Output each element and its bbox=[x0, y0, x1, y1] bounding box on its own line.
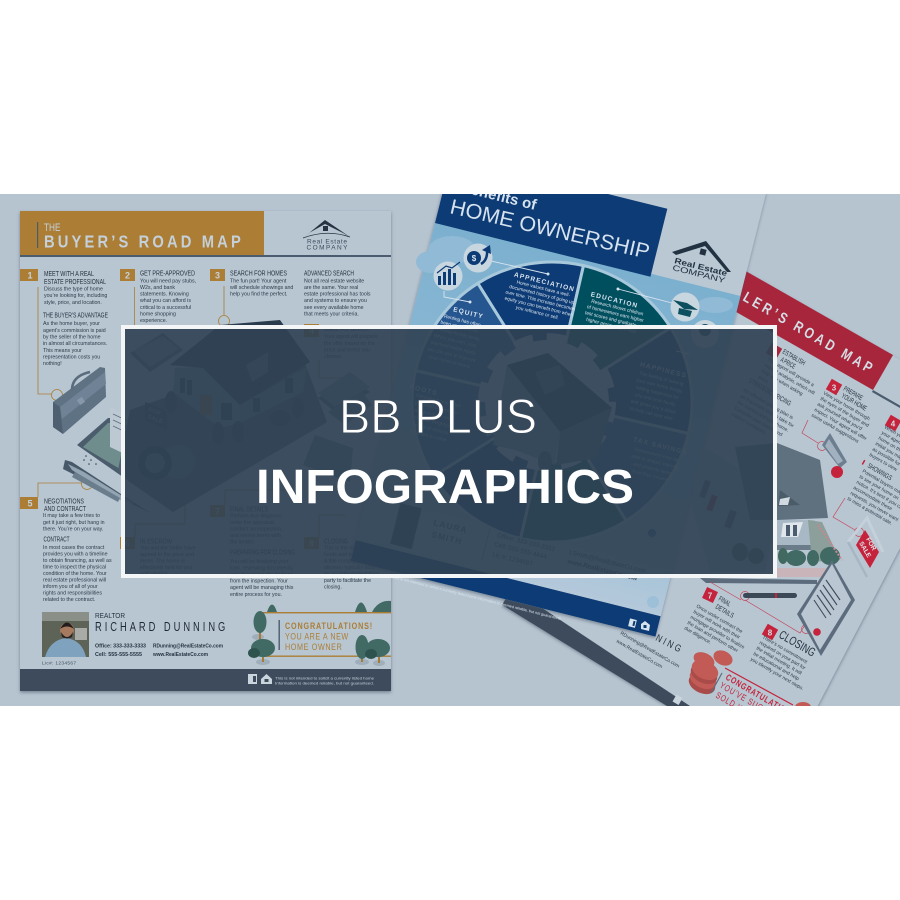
sector: appreciation bbox=[478, 262, 584, 402]
step 2: get pre-approved: critical to a successful bbox=[140, 305, 191, 311]
label: roots: and local schools bbox=[412, 422, 449, 437]
icon: chat bubble and check badge bbox=[138, 445, 195, 480]
step 8: closing bbox=[749, 624, 818, 692]
step 3: search for homes: The fun part! Your agent bbox=[230, 278, 287, 284]
label: education: higher percentages than bbox=[585, 317, 637, 335]
label: tax savings: able to deduct interest bbox=[631, 453, 679, 471]
step 2: get pre-approved: You will need pay stubs, bbox=[140, 278, 196, 284]
paper and sky area bbox=[351, 116, 766, 637]
step 2: establish a price: STRATEGIC PRICING bbox=[747, 378, 792, 408]
step 3: search for homes bbox=[210, 268, 293, 298]
agent contact: laura smith: Cell: 555-555-4444 bbox=[494, 541, 548, 561]
clouds bbox=[416, 236, 733, 313]
step 7: final details: from the inspection. Your bbox=[230, 578, 288, 584]
step 1: meet with a real estate professional: 1 bbox=[27, 270, 33, 280]
agent details: Office: 333-333-3333 bbox=[95, 644, 146, 650]
step 3: search for homes: 3 bbox=[215, 270, 220, 280]
agent details: seller's document: NING bbox=[654, 632, 685, 655]
label: equity: your home or invest bbox=[428, 354, 471, 370]
step 8: closing: CLOSING bbox=[324, 536, 348, 546]
heading: benefits of home ownership: Benefits of bbox=[459, 179, 539, 214]
icon: money stacks bbox=[318, 390, 369, 410]
icon: for sale sign: FOR bbox=[864, 536, 877, 552]
sector: tax savings bbox=[552, 402, 688, 521]
step 8: closing: required on your part for bbox=[758, 640, 807, 672]
sector: happiness bbox=[552, 328, 692, 434]
agent details: Cell: 555-555-5555 bbox=[95, 652, 142, 658]
agent contact: laura smith: www.RealEstateCo.com bbox=[566, 558, 638, 582]
step 8: closing: as an independent third bbox=[324, 572, 379, 578]
label: tax savings bbox=[631, 436, 688, 484]
step 3: search for homes: will schedule showings and bbox=[230, 285, 293, 291]
step 2: establish a price: the market and your home. bbox=[736, 400, 790, 434]
step 3: prepare your home: the eyes of the buyer and bbox=[819, 396, 870, 429]
step 7: final details: loan, reviewing documents, bbox=[230, 566, 294, 572]
illustration: house bbox=[690, 443, 842, 584]
step 6: in escrow: terms. The home is bbox=[140, 558, 185, 564]
callout: you've successfully sold your home: SOLD YOUR HOME bbox=[714, 690, 781, 735]
step 7: final details: and review terms with bbox=[230, 533, 281, 539]
agent contact: laura smith bbox=[390, 503, 659, 608]
logo: real estate company bbox=[303, 220, 350, 252]
label: education bbox=[584, 291, 645, 335]
sector: roots bbox=[412, 370, 552, 476]
footer: home ownership document bbox=[392, 575, 650, 631]
step 3: prepare your home: YOUR HOME bbox=[840, 393, 868, 413]
title: INFOGRAPHICS: INFOGRAPHICS bbox=[256, 461, 634, 514]
step 1: meet with a real estate professional: representation costs you bbox=[43, 354, 100, 360]
step 7: final details: conduct an inspection, bbox=[230, 526, 282, 532]
step 2: establish a price: help you when asking bbox=[760, 369, 804, 397]
step 7: final details: the loan and perform other bbox=[686, 620, 739, 654]
step 3: prepare your home: expect. Your agent will offer bbox=[813, 407, 868, 442]
text block: advanced search: and systems to ensure you bbox=[304, 298, 367, 304]
label: happiness: HAPPINESS bbox=[639, 361, 688, 380]
callout: you've successfully sold your home: YOU’VE SUCCESSFULLY bbox=[718, 680, 805, 736]
step 5: negotiations and contract: time to inspect the physical bbox=[43, 564, 106, 570]
text block: advanced search: estate professional has tools bbox=[304, 292, 371, 298]
step 4: make an offer bbox=[304, 324, 378, 360]
icon: for sale sign: SALE bbox=[857, 540, 872, 560]
header: seller's road map: LER’S ROAD MAP bbox=[740, 289, 875, 376]
title: BB PLUS: BB PLUS bbox=[339, 391, 537, 444]
panel: buyer's road map document bbox=[20, 211, 391, 691]
step 3: prepare your home: 3 bbox=[832, 384, 837, 392]
step 7: final details: FINAL bbox=[717, 596, 732, 608]
label: roots: for years to come bbox=[410, 429, 447, 444]
label: tax savings: and property taxes bbox=[632, 461, 673, 477]
agent details: seller's document: RDunning@RealEstateCo.com bbox=[619, 631, 680, 669]
step 2: get pre-approved: experience. bbox=[140, 318, 167, 324]
label: education: EDUCATION bbox=[590, 291, 639, 310]
step 4: make an offer: MAKE AN OFFER bbox=[324, 324, 369, 333]
heading: benefits of home ownership: HOME OWNERSHIP bbox=[448, 195, 652, 264]
step 2: establish a price: an important step to take for bbox=[739, 394, 795, 429]
step 8: closing: closing. bbox=[324, 584, 342, 590]
step 7: final details: 7 bbox=[708, 592, 713, 600]
illustration: isometric house bbox=[118, 320, 326, 470]
footer: seller's document bbox=[502, 588, 690, 706]
step 3: prepare your home: PREPARE bbox=[842, 386, 864, 402]
step 5: negotiations and contract: related to the contract. bbox=[43, 597, 95, 603]
icon: money growth bbox=[464, 244, 550, 276]
step 1: meet with a real estate professional: THE BUYER’S ADVANTAGE bbox=[43, 310, 108, 320]
header: seller's road map bbox=[736, 272, 900, 408]
label: equity: throwing money away. bbox=[434, 325, 481, 343]
step 2: establish a price: Consider your needs and bbox=[733, 406, 784, 438]
label: happiness: you and your family bbox=[634, 392, 677, 408]
step 3: search for homes: SEARCH FOR HOMES bbox=[230, 268, 287, 278]
sector: stability bbox=[433, 402, 552, 538]
label: education: Research shows children bbox=[591, 299, 644, 318]
icon: clipboard bbox=[797, 560, 855, 656]
step 1: meet with a real estate professional: ESTATE PROFESSIONAL bbox=[44, 277, 106, 286]
step 5: negotiations and contract: rights and responsibilities bbox=[43, 590, 102, 596]
step 4: showings: to miss a potential sale. bbox=[846, 496, 893, 527]
step 8: closing bbox=[304, 536, 379, 590]
step 5: negotiations and contract: get it just right, but hang in bbox=[43, 520, 105, 526]
label: appreciation: APPRECIATION bbox=[513, 272, 576, 294]
icon: for sale sign bbox=[848, 518, 883, 577]
step 2: get pre-approved: statements. Knowing bbox=[140, 292, 189, 298]
illustration: isometric house: FOR bbox=[147, 407, 162, 417]
panel: home ownership document bbox=[351, 116, 766, 637]
agent contact: laura smith: Office: 333-333-3333 bbox=[497, 532, 556, 553]
step 3: prepare your home bbox=[810, 379, 871, 445]
icons: trees bbox=[248, 601, 391, 666]
icon: pen bbox=[743, 593, 797, 598]
icon: coins bbox=[686, 647, 811, 712]
text block: advanced search: see every available home bbox=[304, 305, 364, 311]
step 1: meet with a real estate professional: in almost all circumstances. bbox=[43, 341, 107, 347]
icon: contract paper bbox=[303, 435, 353, 482]
logo: real estate company: COMPANY bbox=[306, 244, 348, 252]
step 2: get pre-approved: what you can afford is bbox=[140, 298, 191, 304]
step 1: meet with a real estate professional bbox=[20, 269, 108, 367]
background band bbox=[0, 194, 900, 706]
footer: buyer's document: This is not intended to solicit a currently listed home bbox=[275, 676, 375, 680]
label: tax savings: from their income bbox=[632, 469, 669, 484]
label: roots: with your neighbors bbox=[411, 414, 454, 430]
step 8: closing: 8 bbox=[768, 628, 773, 638]
step 7: final details: 7 bbox=[215, 506, 220, 516]
step 2: establish a price: market conditions. bbox=[730, 412, 767, 437]
label: appreciation: equity you can benefit from when bbox=[504, 296, 574, 319]
connector lines: seller's map bbox=[710, 420, 864, 634]
step 4: make an offer: price and terms you bbox=[324, 348, 370, 354]
step 4: showings: buyers to view bbox=[868, 452, 898, 473]
label: appreciation bbox=[504, 272, 576, 321]
step 8: closing: the initial meeting. It will bbox=[755, 646, 803, 677]
step 7: final details: PREPARING FOR CLOSING bbox=[230, 548, 295, 556]
icon: keyboard tablet bbox=[822, 433, 847, 478]
step 8: closing: attorney typically acts bbox=[324, 565, 375, 571]
label: happiness: and gives you a place bbox=[630, 399, 677, 416]
icon: growth chart bbox=[434, 262, 472, 304]
logo: real estate company: Real Estate bbox=[307, 238, 347, 246]
callout: congratulations: HOME OWNER bbox=[285, 642, 342, 652]
label: roots: and put down roots bbox=[414, 407, 455, 423]
label: equity: When you own, your bbox=[433, 333, 478, 349]
icon: location pin bbox=[676, 320, 719, 354]
step 2: get pre-approved: GET PRE-APPROVED bbox=[140, 268, 195, 278]
callout: congratulations bbox=[263, 612, 391, 657]
step 8: closing: There’s no commitment bbox=[761, 635, 809, 666]
step 8: closing: 8 bbox=[309, 538, 314, 548]
step 1: meet with a real estate professional: you’re looking for, including bbox=[44, 293, 107, 299]
footer: buyer's document bbox=[20, 669, 391, 691]
icon: pen bbox=[63, 460, 150, 513]
label: equity: you can use to improve bbox=[426, 346, 476, 364]
step 4: showings: accommodate these bbox=[852, 485, 893, 512]
step 2: establish a price: A PRICE bbox=[779, 357, 797, 371]
label: appreciation: over time. This increase becomes bbox=[505, 289, 576, 313]
sector: equity bbox=[416, 283, 552, 402]
step 7: final details: Perform due diligence, bbox=[230, 514, 283, 520]
step 6: in escrow: agreed to the price and bbox=[140, 552, 194, 558]
logo: real estate company: Real Estate bbox=[674, 256, 729, 278]
step 8: closing: party to facilitate the bbox=[324, 578, 371, 584]
step 4: showings: requests, you never want bbox=[849, 491, 900, 523]
label: happiness: The feeling of owning bbox=[638, 371, 684, 388]
agent contact: laura smith: LAURA bbox=[433, 517, 469, 535]
label: equity: payment builds equity bbox=[430, 340, 477, 357]
panel: seller's road map document bbox=[501, 272, 900, 706]
agent details: REALTOR bbox=[95, 613, 125, 620]
step 5: negotiations and contract: AND CONTRACT bbox=[44, 504, 86, 513]
step 6: in escrow: 6 bbox=[125, 538, 130, 548]
step 4: make an offer: Your agent will prepare bbox=[324, 334, 378, 340]
step 7: final details: You will be finalizing your bbox=[230, 559, 289, 565]
footer: home ownership document: This is not intended to solicit a currently listed home information is deemed reliable, but not guaranteed! bbox=[392, 575, 561, 621]
icon: smartphone bbox=[77, 414, 162, 504]
wheel chart: benefits bbox=[412, 262, 692, 542]
text block: advanced search: Not all real estate website bbox=[304, 278, 364, 284]
step 7: final details bbox=[210, 504, 295, 598]
text block: advanced search: that meets your criteria. bbox=[304, 312, 359, 318]
step 4: make an offer: choose. bbox=[324, 354, 342, 360]
agent contact: laura smith: Lic #: 1234567 bbox=[492, 551, 534, 568]
step 7: final details: order the appraisal, bbox=[230, 520, 275, 526]
step 7: final details: FINAL DETAILS bbox=[230, 504, 268, 514]
icon: graduation cap bbox=[616, 288, 700, 322]
document previews bbox=[18, 194, 900, 706]
sector: wealth bbox=[520, 402, 626, 542]
agent details: RDunning@RealEstateCo.com bbox=[153, 644, 224, 650]
step 5: negotiations and contract: real estate professional will bbox=[43, 578, 106, 584]
label: equity: Renting has often bbox=[443, 314, 482, 329]
agent details: seller's document: www.RealEstateCo.com bbox=[615, 639, 663, 670]
label: appreciation: documented history of going up bbox=[509, 284, 575, 306]
step 8: closing: A title company or bbox=[324, 558, 366, 564]
step 8: closing: you identify your next steps. bbox=[749, 657, 805, 692]
title overlay panel bbox=[123, 327, 775, 576]
step 5: negotiations and contract: NEGOTIATIONS bbox=[44, 496, 84, 506]
text block: advanced search: ADVANCED SEARCH bbox=[304, 268, 354, 278]
icon: briefcase bbox=[53, 367, 106, 434]
label: equity: EQUITY bbox=[452, 306, 484, 321]
agent details: RICHARD DUNNING bbox=[95, 621, 225, 634]
step 7: final details: mortgage provider to finalize bbox=[689, 615, 746, 651]
step 2: establish a price: An effective pricing plan is bbox=[742, 388, 795, 421]
step 7: final details: DETAILS bbox=[714, 604, 735, 620]
step 7: final details: due diligence. bbox=[683, 626, 712, 646]
step 2: get pre-approved: W2s, and bank bbox=[140, 285, 175, 291]
connector lines bbox=[38, 286, 345, 537]
step 2: establish a price: Your agent will provide a bbox=[766, 357, 815, 388]
step 3: prepare your home: some useful suggestions bbox=[810, 413, 860, 445]
step 5: negotiations and contract: condition of the home. Your bbox=[43, 571, 107, 577]
step 6: in escrow: You and the Seller have bbox=[140, 546, 196, 552]
label: appreciation: Home values have a well- bbox=[516, 279, 571, 299]
label: roots: you build community bbox=[414, 400, 459, 416]
step 1: meet with a real estate professional: This means your bbox=[43, 348, 82, 354]
label: appreciation: you refinance or sell. bbox=[515, 305, 559, 321]
callout: congratulations: YOU ARE A NEW bbox=[285, 632, 348, 642]
step 6: in escrow: effectively held for you bbox=[140, 565, 192, 571]
logo: real estate company bbox=[672, 241, 731, 285]
step 7: final details: buyer will work with their bbox=[692, 609, 741, 641]
header: buyer's road map: THE bbox=[44, 222, 61, 234]
step 7: final details: agent will be managing this bbox=[230, 585, 294, 591]
label: equity: been compared to bbox=[440, 319, 479, 335]
step 7: final details: entire process for you. bbox=[230, 592, 282, 598]
agent details: Lic#: 1234567 bbox=[42, 660, 76, 666]
step 4: showings: to see your home on bbox=[858, 474, 900, 502]
step 5: negotiations and contract: provides you with a timeline bbox=[43, 552, 108, 558]
step 2: establish a price: price. bbox=[757, 375, 770, 386]
icon: money growth: $ bbox=[472, 254, 477, 263]
agent photo bbox=[42, 612, 89, 657]
step 8: closing: This is the to transfer bbox=[324, 546, 373, 552]
step 6: in escrow: IN ESCROW bbox=[140, 536, 172, 546]
agent contact: laura smith: LSmith@RealEstateCo.com bbox=[569, 549, 646, 575]
step 5: negotiations and contract: there. You’re on your way. bbox=[43, 526, 103, 532]
step 8: closing: be educational and help bbox=[752, 651, 800, 682]
label: happiness: to truly call your own bbox=[629, 406, 673, 422]
step 7: final details: the lender. bbox=[230, 540, 255, 546]
text block: advanced search bbox=[304, 268, 371, 318]
agent contact: laura smith: SMITH bbox=[431, 529, 463, 547]
step 2: get pre-approved bbox=[120, 268, 196, 324]
footer: buyer's document: Information is deemed reliable, but not guaranteed. bbox=[275, 680, 374, 686]
step 1: meet with a real estate professional: As the home buyer, your bbox=[43, 321, 100, 327]
step 7: final details: and discussing the findings bbox=[230, 572, 293, 578]
step 6: in escrow: until closing. bbox=[140, 572, 169, 578]
step 4: showings bbox=[846, 415, 900, 527]
step 2: get pre-approved: 2 bbox=[125, 270, 130, 280]
step 2: establish a price: ESTABLISH bbox=[781, 349, 806, 367]
step 7: final details bbox=[683, 587, 746, 654]
label: roots: Owning a home helps bbox=[415, 393, 462, 410]
header: buyer's road map bbox=[20, 211, 391, 257]
step 2: establish a price: market analysis, which will bbox=[763, 363, 816, 396]
label: roots: ROOTS bbox=[408, 384, 438, 397]
step 1: meet with a real estate professional: Discuss the type of home bbox=[44, 286, 103, 292]
step 3: search for homes: help you find the perfect. bbox=[230, 292, 288, 298]
step 3: prepare your home: View your home through bbox=[822, 391, 871, 422]
label: equity bbox=[426, 306, 484, 370]
agent details: www.RealEstateCo.com bbox=[152, 652, 209, 658]
callout: you've successfully sold your home: CONGRATULATIONS! bbox=[724, 672, 800, 722]
step 1: meet with a real estate professional: agent’s commission is paid bbox=[43, 328, 106, 334]
step 7: final details: Once under contract the bbox=[695, 604, 744, 635]
step 1: meet with a real estate professional: nothing! bbox=[43, 361, 62, 367]
infographic banner bbox=[0, 194, 900, 706]
step 4: make an offer: 4 bbox=[309, 326, 314, 336]
text block: advanced search: are the same. Your real bbox=[304, 285, 358, 291]
step 8: closing: CLOSING bbox=[776, 627, 818, 660]
callout: congratulations: CONGRATULATIONS! bbox=[285, 621, 372, 631]
step 6: in escrow bbox=[120, 537, 195, 574]
label: education: test scores and graduate at bbox=[584, 310, 643, 330]
agent details bbox=[42, 613, 225, 666]
label: tax savings: Homeowners may be bbox=[634, 447, 679, 464]
step 3: prepare your home: ask yourself what you’d bbox=[816, 402, 863, 432]
step 5: negotiations and contract: CONTRACT bbox=[44, 534, 70, 544]
sector: education bbox=[552, 266, 671, 402]
label: happiness: lasting happiness for bbox=[635, 385, 680, 401]
centre gear with house bbox=[482, 337, 612, 473]
label: happiness bbox=[629, 361, 688, 422]
header: buyer's road map: BUYER’S ROAD MAP bbox=[44, 232, 241, 252]
label: roots bbox=[408, 384, 462, 444]
label: tax savings: TAX SAVINGS bbox=[632, 436, 688, 457]
step 4: showings: 4 bbox=[891, 420, 896, 428]
step 2: get pre-approved: home shopping bbox=[140, 312, 176, 318]
step 8: closing: funds and ownership. bbox=[324, 552, 374, 558]
step 5: negotiations and contract: In most cases the contract bbox=[43, 545, 105, 551]
step 2: establish a price bbox=[730, 343, 816, 438]
step 1: meet with a real estate professional: style, price, and location. bbox=[44, 300, 102, 306]
step 5: negotiations and contract: It may take a few tries to bbox=[43, 513, 100, 519]
step 5: negotiations and contract bbox=[20, 496, 112, 603]
label: happiness: your own home brings bbox=[636, 377, 683, 395]
step 5: negotiations and contract: 5 bbox=[27, 498, 33, 508]
step 4: make an offer: the offer based on the bbox=[324, 341, 375, 347]
icon: documents stack bbox=[130, 333, 183, 372]
label: education: of homeowners earn higher bbox=[586, 304, 645, 324]
step 1: meet with a real estate professional: by the seller of the home bbox=[43, 334, 101, 340]
illustration: isometric house: SALE bbox=[146, 414, 163, 425]
step 1: meet with a real estate professional: MEET WITH A REAL bbox=[44, 269, 94, 278]
step 5: negotiations and contract: to obtain financing, as well as bbox=[43, 558, 112, 564]
logo: real estate company: COMPANY bbox=[672, 263, 727, 285]
step 5: negotiations and contract: inform you of all of your bbox=[43, 584, 98, 590]
